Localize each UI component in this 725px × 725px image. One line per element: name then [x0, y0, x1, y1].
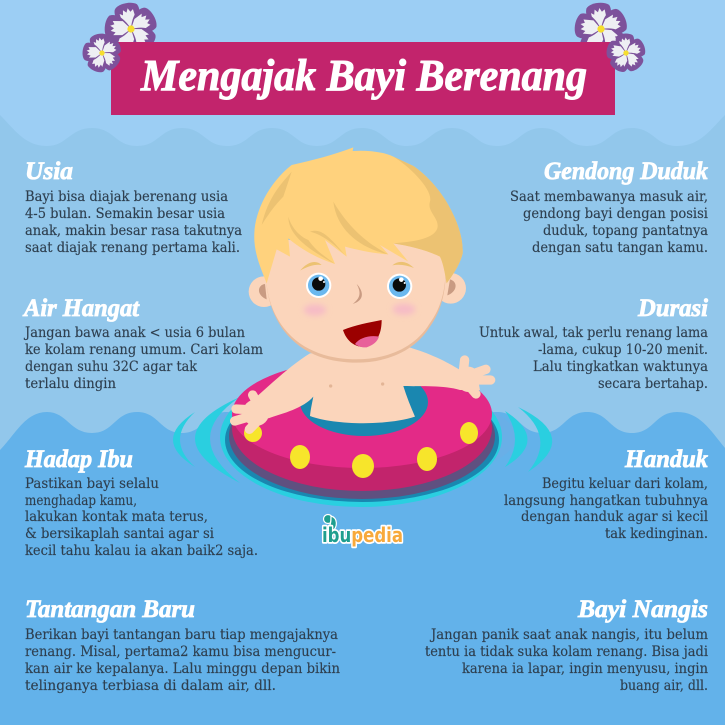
body text — [23, 325, 263, 392]
heading: Handuk — [624, 446, 708, 473]
body text: karena ia lapar, ingin menyusu, ingin — [462, 661, 708, 677]
cheeks — [304, 304, 415, 316]
eyebrows — [300, 262, 414, 271]
nipples — [329, 384, 332, 388]
body text: saat diajak renang pertama kali. — [25, 240, 240, 256]
ring dots — [244, 422, 478, 478]
flowers behind banner — [104, 0, 632, 61]
tongue — [355, 336, 379, 347]
body text — [25, 189, 242, 256]
body text: buang air, dll. — [620, 678, 708, 694]
body text: Jangan bawa anak < usia 6 bulan — [23, 325, 245, 341]
panel: gendong duduk — [510, 158, 709, 256]
body text: Saat membawanya masuk air, — [510, 189, 708, 205]
ears — [249, 273, 466, 307]
logo: ibupedia — [322, 514, 403, 547]
body text: tentu ia tidak suka kolam renang. Bisa jadi — [425, 644, 709, 660]
body text: Jangan panik saat anak nangis, itu belum — [429, 627, 708, 643]
body text: gendong bayi dengan posisi — [523, 206, 709, 222]
body text: & bersikaplah santai agar si — [25, 526, 215, 542]
body text: Berikan bayi tantangan baru tiap mengajaknya — [25, 627, 338, 643]
hair — [254, 147, 463, 283]
heading: Bayi Nangis — [577, 596, 708, 623]
panel: usia — [25, 158, 242, 256]
body text: dengan suhu 32C agar tak — [25, 359, 198, 375]
body text: duduk, topang pantatnya — [543, 223, 708, 239]
body text — [479, 325, 708, 392]
body text — [25, 627, 340, 694]
body text: ke kolam renang umum. Cari kolam — [25, 342, 263, 358]
right hand — [457, 360, 491, 394]
body text — [425, 627, 709, 694]
lower water band — [0, 412, 725, 725]
panel: hadap ibu — [24, 446, 258, 559]
small flower right — [603, 29, 650, 77]
eyes — [306, 273, 412, 299]
panel: bayi nangis — [425, 596, 709, 694]
small flower left — [82, 32, 123, 75]
body text: dengan handuk agar si kecil — [521, 509, 708, 525]
mouth — [343, 320, 382, 347]
hair shading — [262, 157, 463, 283]
body text: Untuk awal, tak perlu renang lama — [479, 325, 708, 341]
logo figure icon — [324, 514, 336, 532]
baby — [235, 147, 491, 429]
panel: tantangan baru — [25, 596, 340, 694]
body text: Bayi bisa diajak berenang usia — [25, 189, 228, 205]
body text: menghadap kamu, — [25, 493, 137, 509]
body text: kan air ke kepalanya. Lalu minggu depan bikin — [25, 661, 340, 677]
head — [249, 147, 466, 363]
heading: Tantangan Baru — [25, 596, 195, 623]
body text: telinganya terbiasa di dalam air, dll. — [25, 678, 276, 694]
heading: Usia — [25, 158, 73, 185]
title: Mengajak Bayi Berenang — [140, 51, 587, 100]
heading: Air Hangat — [22, 295, 140, 322]
body text — [504, 476, 708, 542]
body text: dengan satu tangan kamu. — [532, 240, 708, 256]
left hand — [235, 395, 269, 429]
body and arms — [235, 347, 491, 429]
body text: langsung hangatkan tubuhnya — [504, 493, 708, 509]
body text: Lalu tingkatkan waktunya — [533, 359, 708, 375]
body text: renang. Misal, pertama2 kamu bisa mengucur- — [25, 644, 336, 660]
body text: secara bertahap. — [598, 376, 708, 392]
body text: tak kedinginan. — [605, 526, 708, 542]
heading: Durasi — [637, 295, 708, 322]
water ripples — [173, 367, 552, 507]
title banner — [111, 42, 615, 115]
face — [266, 240, 446, 363]
body text — [25, 476, 258, 559]
panel: handuk — [504, 446, 708, 542]
body text: lakukan kontak mata terus, — [25, 509, 208, 525]
body text: Begitu keluar dari kolam, — [542, 476, 708, 492]
panel: durasi — [479, 295, 708, 392]
body text: anak, makin besar rasa takutnya — [25, 223, 242, 239]
nose — [353, 284, 362, 304]
body text: Pastikan bayi selalu — [25, 476, 159, 492]
heading: Hadap Ibu — [24, 446, 133, 473]
logo wordmark: ibupedia — [322, 523, 403, 547]
body text: kecil tahu kalau ia akan baik2 saja. — [25, 543, 258, 559]
heading: Gendong Duduk — [544, 158, 708, 185]
swim ring — [229, 360, 495, 499]
body text: -lama, cukup 10-20 menit. — [538, 342, 708, 358]
body text: terlalu dingin — [25, 376, 116, 392]
panel: air hangat — [22, 295, 263, 392]
body text: 4-5 bulan. Semakin besar usia — [25, 206, 225, 222]
body text — [510, 189, 709, 256]
